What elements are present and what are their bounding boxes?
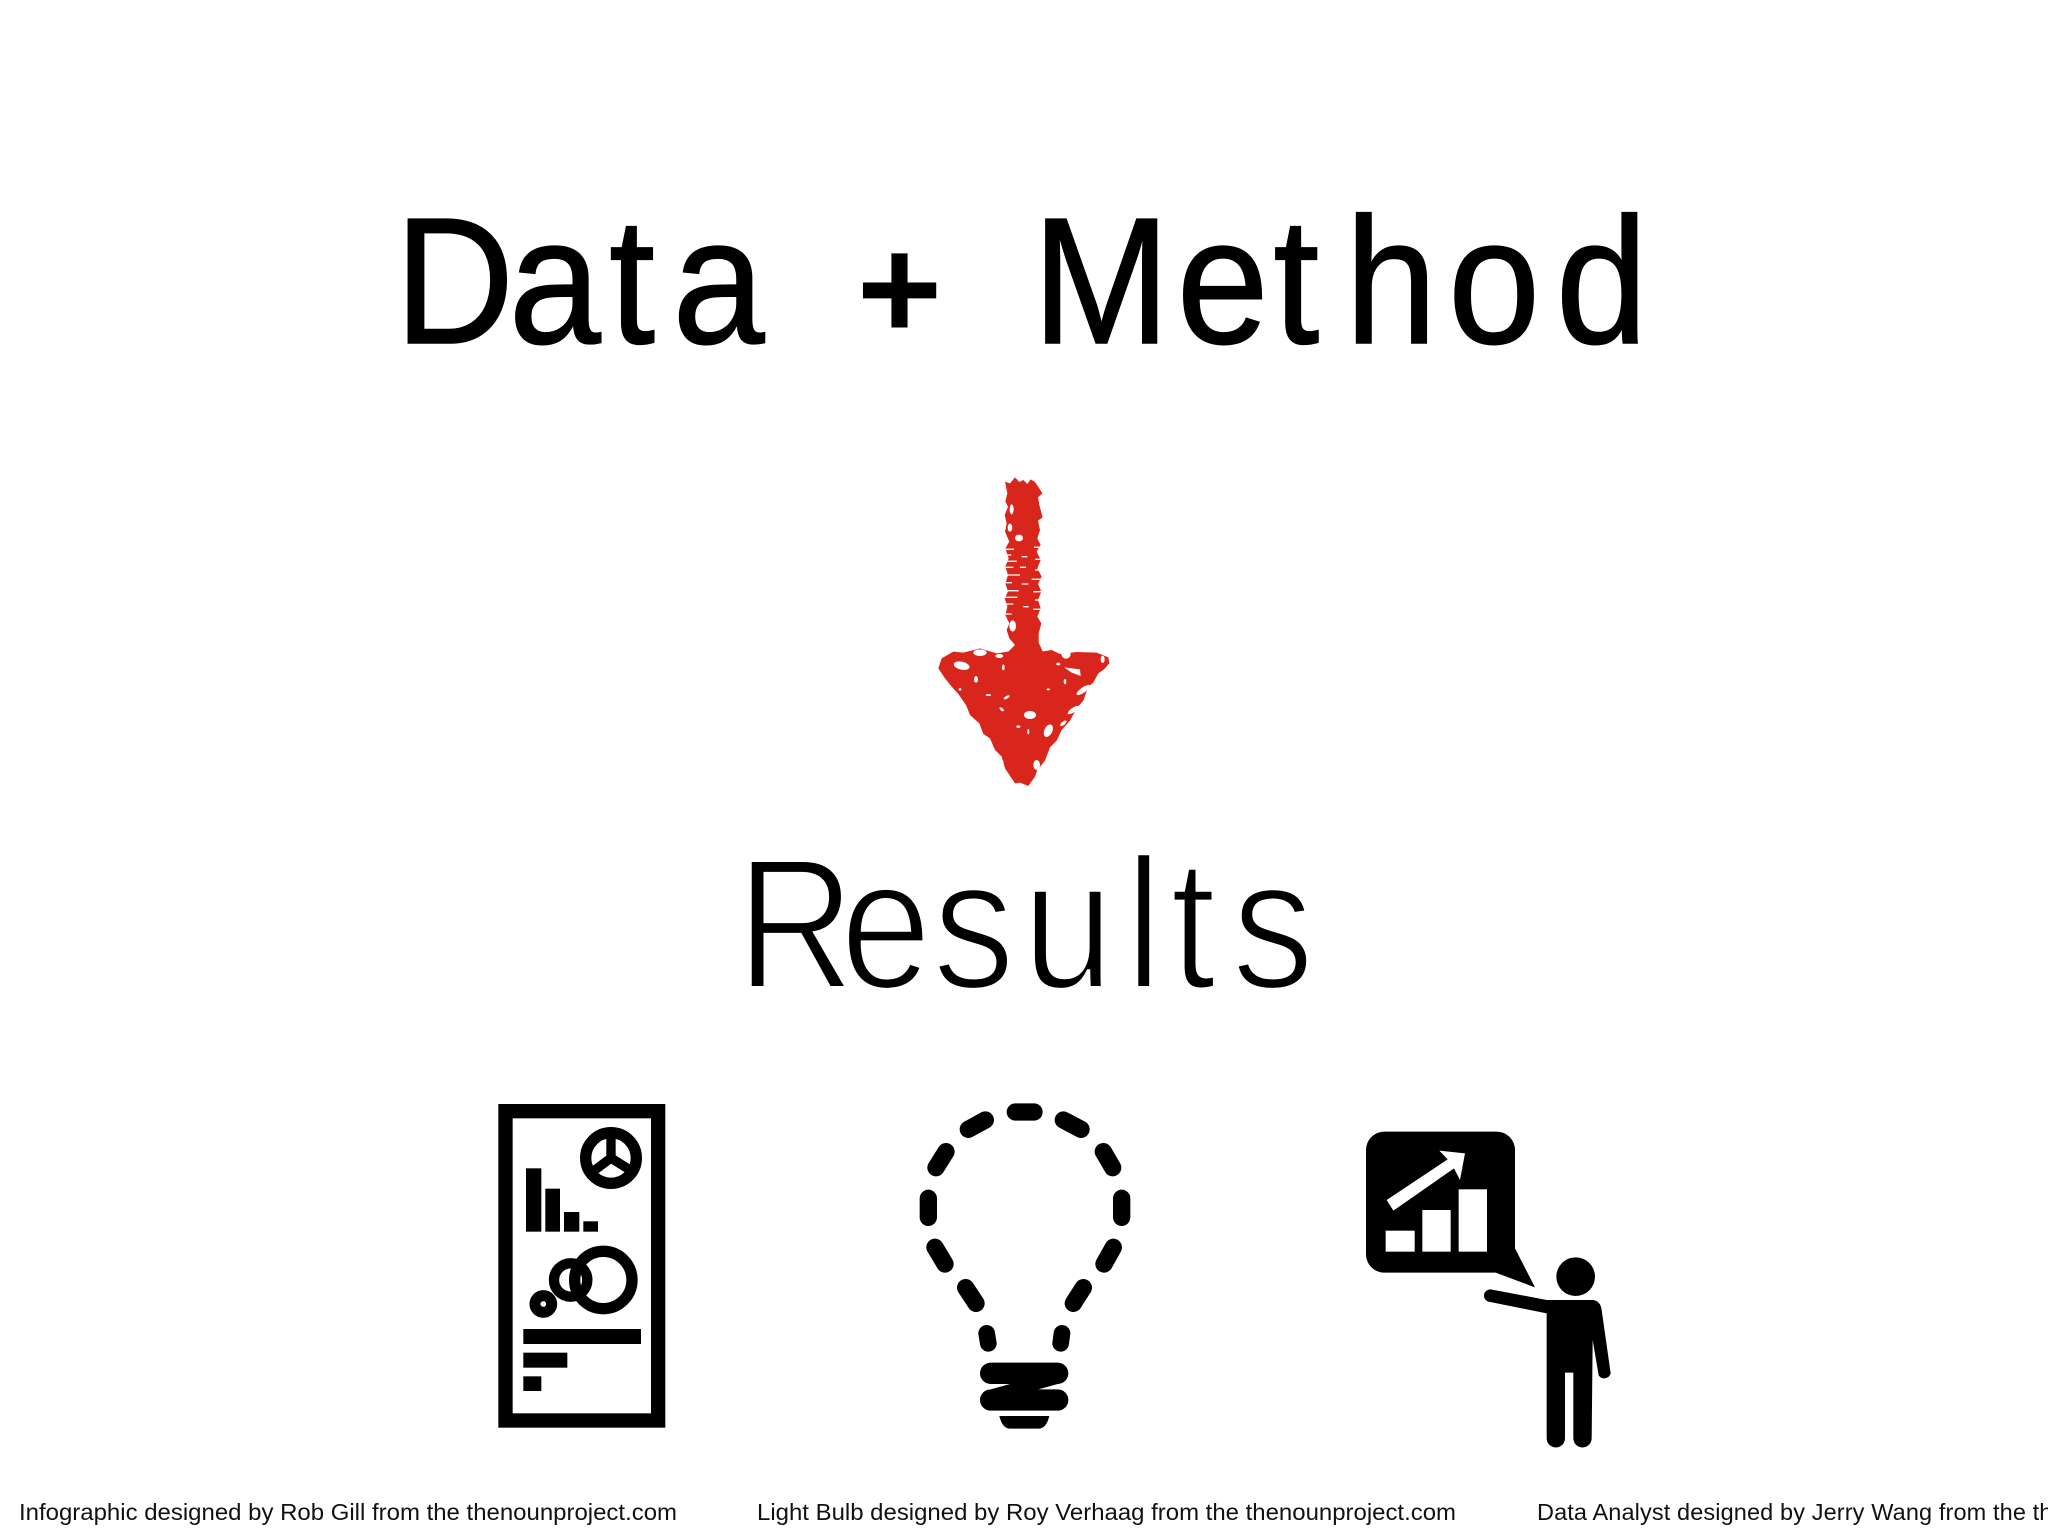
word: Data: Data: [395, 180, 765, 382]
credit: light bulb: Light Bulb designed by Roy Verhaag from the thenounproject.com: [757, 1499, 1456, 1525]
icon: data analyst presenting chart: [1366, 1132, 1611, 1447]
icon: infographic poster: [505, 1111, 658, 1420]
icon: dashed light bulb: [928, 1112, 1122, 1429]
credit: infographic: Infographic designed by Rob Gill from the thenounproject.com: [19, 1499, 677, 1525]
title: Data + Method: [395, 180, 1648, 382]
plus sign: +: [857, 207, 942, 370]
heading: Results: Results: [737, 820, 1314, 1028]
presenter figure: [1484, 1257, 1611, 1447]
speech bubble with chart: [1366, 1132, 1535, 1287]
credits line: [19, 1499, 2048, 1525]
word: Method: Method: [1032, 180, 1648, 382]
arrow: red hand-drawn down arrow: [938, 477, 1109, 786]
